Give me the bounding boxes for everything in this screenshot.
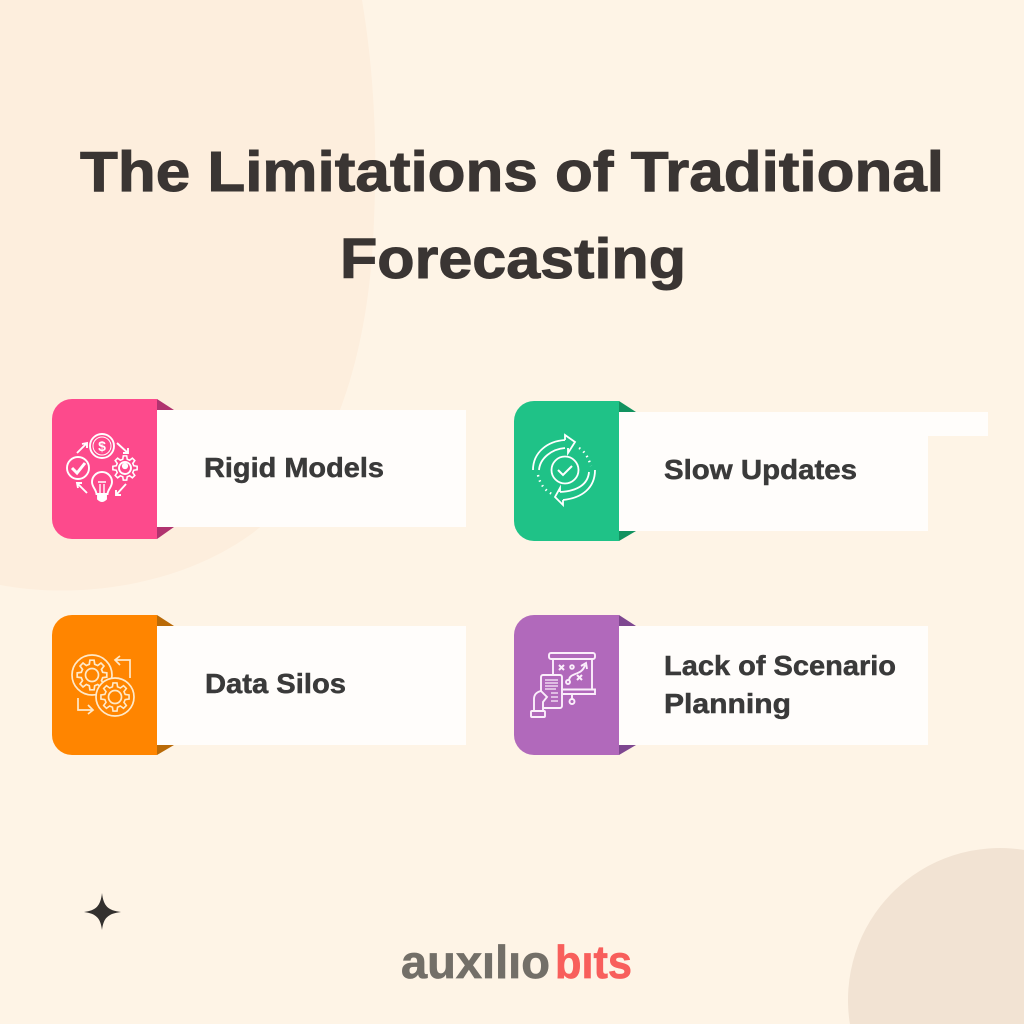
text panel: Slow Updates — [619, 412, 988, 531]
icon: finance cycle with coin, gear, bulb and check: $ — [98, 438, 106, 454]
background blob: top left — [0, 0, 375, 591]
text panel: Data Silos — [157, 626, 466, 745]
ribbon folds: orange — [157, 615, 174, 755]
card: Lack of Scenario Planning — [514, 615, 928, 755]
icon tile: purple — [514, 615, 619, 755]
icon: interlocking gears with arrows — [72, 655, 134, 716]
ribbon folds: purple — [619, 615, 636, 755]
label: Slow Updates: Slow Updates — [664, 454, 857, 485]
label: Lack of Scenario Planning: Lack of Scenario — [664, 650, 896, 681]
logo: auxiliobits: auxilio — [401, 936, 550, 988]
logo: auxiliobits: bits — [555, 936, 632, 988]
title: The Limitations of Traditional — [80, 140, 944, 204]
card: Slow Updates — [514, 401, 988, 541]
title: Forecasting — [340, 227, 686, 291]
icon tile: green — [514, 401, 619, 541]
label: Data Silos: Data Silos — [205, 668, 346, 699]
icon tile: pink — [52, 399, 157, 539]
label: Lack of Scenario Planning: Planning — [664, 688, 791, 719]
ribbon folds: pink — [157, 399, 174, 539]
ribbon folds: green — [619, 401, 636, 541]
logo: auxiliobits — [401, 936, 632, 988]
icon: finance cycle with coin, gear, bulb and check — [67, 434, 137, 501]
text panel: Rigid Models — [157, 410, 466, 527]
icon: strategy board with document in hand — [531, 653, 595, 717]
card: Data Silos — [52, 615, 466, 755]
icon: four-point star — [84, 893, 121, 930]
card: Rigid Models — [52, 399, 466, 539]
icon: refresh cycle with check — [533, 435, 595, 505]
background circle: bottom right — [848, 848, 1024, 1024]
label: Lack of Scenario Planning — [664, 650, 896, 719]
label: Rigid Models: Rigid Models — [204, 452, 384, 483]
icon tile: orange — [52, 615, 157, 755]
title — [80, 140, 944, 291]
text panel: Lack of Scenario Planning — [619, 626, 928, 745]
